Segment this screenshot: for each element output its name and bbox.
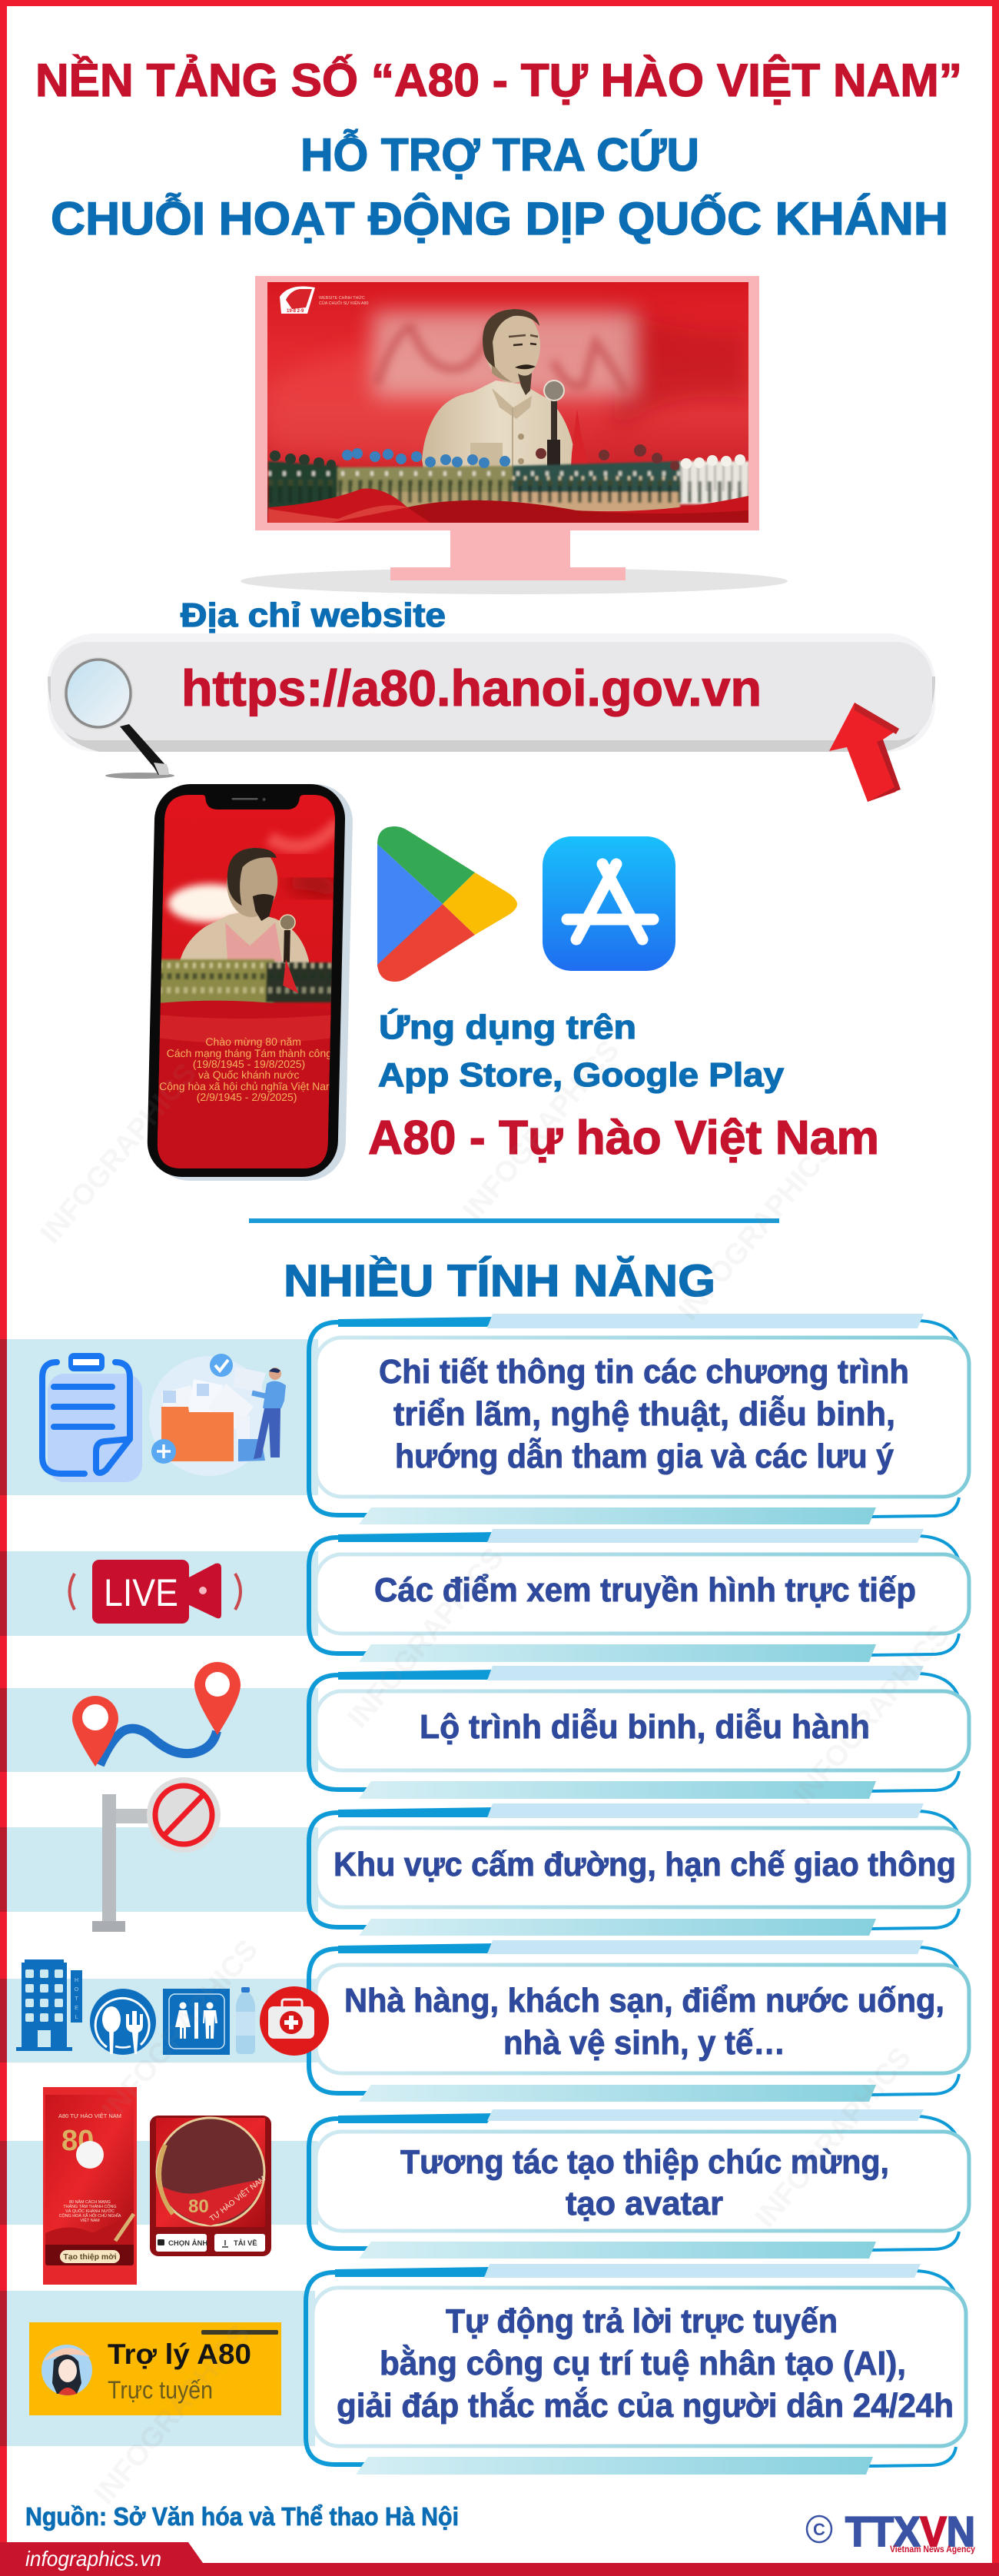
TTXVN logo: C <box>813 2520 825 2539</box>
icon: hotel: T <box>75 1996 78 2002</box>
app line 2: App Store, Google Play <box>378 1056 785 1094</box>
TTXVN logo: Vietnam News Agency <box>890 2545 976 2554</box>
title line 3: CHUỖI HOẠT ĐỘNG DỊP QUỐC KHÁNH <box>51 193 948 244</box>
icon: first aid kit <box>260 1986 329 2056</box>
website label: Địa chỉ website <box>181 597 446 634</box>
row text: Khu vực cấm đường, hạn chế giao thông <box>334 1846 956 1883</box>
title line 1: NỀN TẢNG SỐ “A80 - TỰ HÀO VIỆT NAM” <box>35 55 962 106</box>
greeting card mockup <box>43 2087 137 2285</box>
screen text <box>159 1035 336 1103</box>
icon: live camera <box>69 1560 241 1624</box>
watermarks: INFOGRAPHICS <box>788 1619 956 1811</box>
icon: folder and person <box>149 1354 286 1476</box>
source note: Nguồn: Sở Văn hóa và Thể thao Hà Nội <box>25 2502 459 2531</box>
greeting card mockup: VÀ QUỐC KHÁNH NƯỚC <box>65 2209 115 2214</box>
avatar frame mockup: 80 <box>188 2196 209 2217</box>
icon: clipboard <box>42 1353 142 1482</box>
avatar frame mockup <box>150 2116 271 2256</box>
icon: water bottle <box>236 1987 255 2054</box>
icon: magnifying glass <box>65 658 174 779</box>
avatar frame mockup: TỰ HÀO VIỆT NAM <box>207 2173 267 2223</box>
greeting card mockup: 80 <box>61 2125 94 2157</box>
flag <box>571 410 587 466</box>
row text: Lộ trình diễu binh, diễu hành <box>420 1707 870 1746</box>
assistant badge: Trợ lý A80 <box>108 2338 251 2370</box>
phone with app screen <box>147 784 353 1181</box>
row text: Tự động trả lời trực tuyến <box>446 2302 838 2340</box>
address bar <box>48 633 935 752</box>
screen text: (2/9/1945 - 2/9/2025) <box>197 1091 297 1103</box>
watermarks: INFOGRAPHICS <box>342 1542 510 1734</box>
screen text: Cách mạng tháng Tám thành công <box>167 1047 332 1059</box>
feature row 3: parade route <box>0 1662 969 1799</box>
greeting card mockup: CỘNG HOÀ XÃ HỘI CHỦ NGHĨA <box>59 2213 121 2219</box>
assistant badge: Trực tuyến <box>108 2376 213 2404</box>
watermarks <box>35 1035 956 2511</box>
row text: Tương tác tạo thiệp chúc mừng, <box>400 2143 889 2181</box>
row text <box>379 1353 909 1475</box>
logo <box>280 286 369 314</box>
icon: hotel <box>16 1959 82 2051</box>
row text: nhà vệ sinh, y tế… <box>503 2024 785 2062</box>
watermarks: INFOGRAPHICS <box>35 1058 203 1250</box>
icon: route with pins <box>72 1662 241 1767</box>
watermarks: INFOGRAPHICS <box>88 2318 257 2511</box>
app line 1: Ứng dụng trên <box>379 1008 636 1046</box>
greeting card mockup: A80 TỰ HÀO VIỆT NAM <box>58 2112 121 2119</box>
row text: hướng dẫn tham gia và các lưu ý <box>395 1437 894 1475</box>
footer site name: infographics.vn <box>25 2547 161 2571</box>
feature row 2: live viewing <box>0 1529 969 1662</box>
section heading: NHIỀU TÍNH NĂNG <box>284 1256 715 1306</box>
icon: hotel: O <box>75 1987 79 1993</box>
watermarks: INFOGRAPHICS <box>672 1135 841 1327</box>
row text <box>400 2143 889 2222</box>
feature row 7: AI assistant <box>0 2264 966 2475</box>
icon: hotel: H <box>75 1978 78 1983</box>
footer bar <box>0 2542 999 2576</box>
row text <box>337 2302 954 2425</box>
watermarks: INFOGRAPHICS <box>457 1035 626 1227</box>
row text: Nhà hàng, khách sạn, điểm nước uống, <box>344 1982 944 2019</box>
assistant badge <box>29 2322 281 2415</box>
row text: Các điểm xem truyền hình trực tiếp <box>374 1571 916 1609</box>
screen text: Cộng hòa xã hội chủ nghĩa Việt Nam <box>159 1080 335 1092</box>
icon: no entry sign <box>92 1777 221 1932</box>
red ribbon <box>268 489 748 523</box>
icon: hotel: L <box>75 2015 78 2020</box>
row text <box>344 1982 944 2062</box>
url text: https://a80.hanoi.gov.vn <box>181 660 762 716</box>
microphone <box>543 380 565 467</box>
icon: restroom <box>163 1989 230 2055</box>
screen text: Chào mừng 80 năm <box>205 1035 301 1048</box>
watermarks: INFOGRAPHICS <box>96 1934 264 2126</box>
avatar frame mockup: TẢI VỀ <box>234 2239 257 2248</box>
row text: tạo avatar <box>566 2185 723 2222</box>
icon: restaurant <box>90 1989 156 2055</box>
icon: google play <box>377 826 517 982</box>
row text: bằng công cụ trí tuệ nhân tạo (AI), <box>380 2344 906 2382</box>
monitor with website screenshot <box>241 276 788 594</box>
marching soldiers <box>268 444 749 515</box>
avatar frame mockup: CHỌN ẢNH <box>168 2239 207 2248</box>
TTXVN logo: TTXVN <box>845 2508 975 2555</box>
screen text: (19/8/1945 - 19/8/2025) <box>193 1058 305 1070</box>
avatar <box>41 2345 92 2395</box>
app name: A80 - Tự hào Việt Nam <box>368 1112 879 1165</box>
row text: Chi tiết thông tin các chương trình <box>379 1353 909 1391</box>
greeting card mockup: VIỆT NAM <box>80 2217 100 2223</box>
title <box>35 55 962 244</box>
screen text: và Quốc khánh nước <box>198 1069 300 1081</box>
icon: hotel: E <box>75 2006 78 2011</box>
watermarks: INFOGRAPHICS <box>749 2042 918 2234</box>
greeting card mockup: Tạo thiệp mời <box>63 2252 117 2262</box>
greeting card mockup: THÁNG TÁM THÀNH CÔNG <box>63 2204 117 2209</box>
logo: 19-8 2-9 <box>287 309 304 314</box>
greeting card mockup: 80 NĂM CÁCH MẠNG <box>69 2199 111 2205</box>
feature row 6: greeting cards and avatar <box>0 2087 969 2285</box>
monitor screen <box>267 282 749 523</box>
logo: WEBSITE CHÍNH THỨC <box>319 295 365 301</box>
icon: red arrow <box>829 703 901 802</box>
icon: live camera: LIVE <box>104 1571 178 1614</box>
feature row 1: programme details <box>0 1314 969 1524</box>
president portrait <box>422 309 573 468</box>
row text: triển lãm, nghệ thuật, diễu binh, <box>393 1394 895 1433</box>
section divider <box>249 1218 779 1223</box>
title line 2: HỖ TRỢ TRA CỨU <box>300 129 699 181</box>
icon: app store <box>543 836 675 971</box>
row text: giải đáp thắc mắc của người dân 24/24h <box>337 2386 954 2425</box>
feature row 5: services <box>0 1940 969 2102</box>
logo: CỦA CHUỖI SỰ KIỆN A80 <box>319 300 369 306</box>
app store text <box>368 1008 879 1165</box>
feature row 4: road closures <box>0 1777 969 1936</box>
